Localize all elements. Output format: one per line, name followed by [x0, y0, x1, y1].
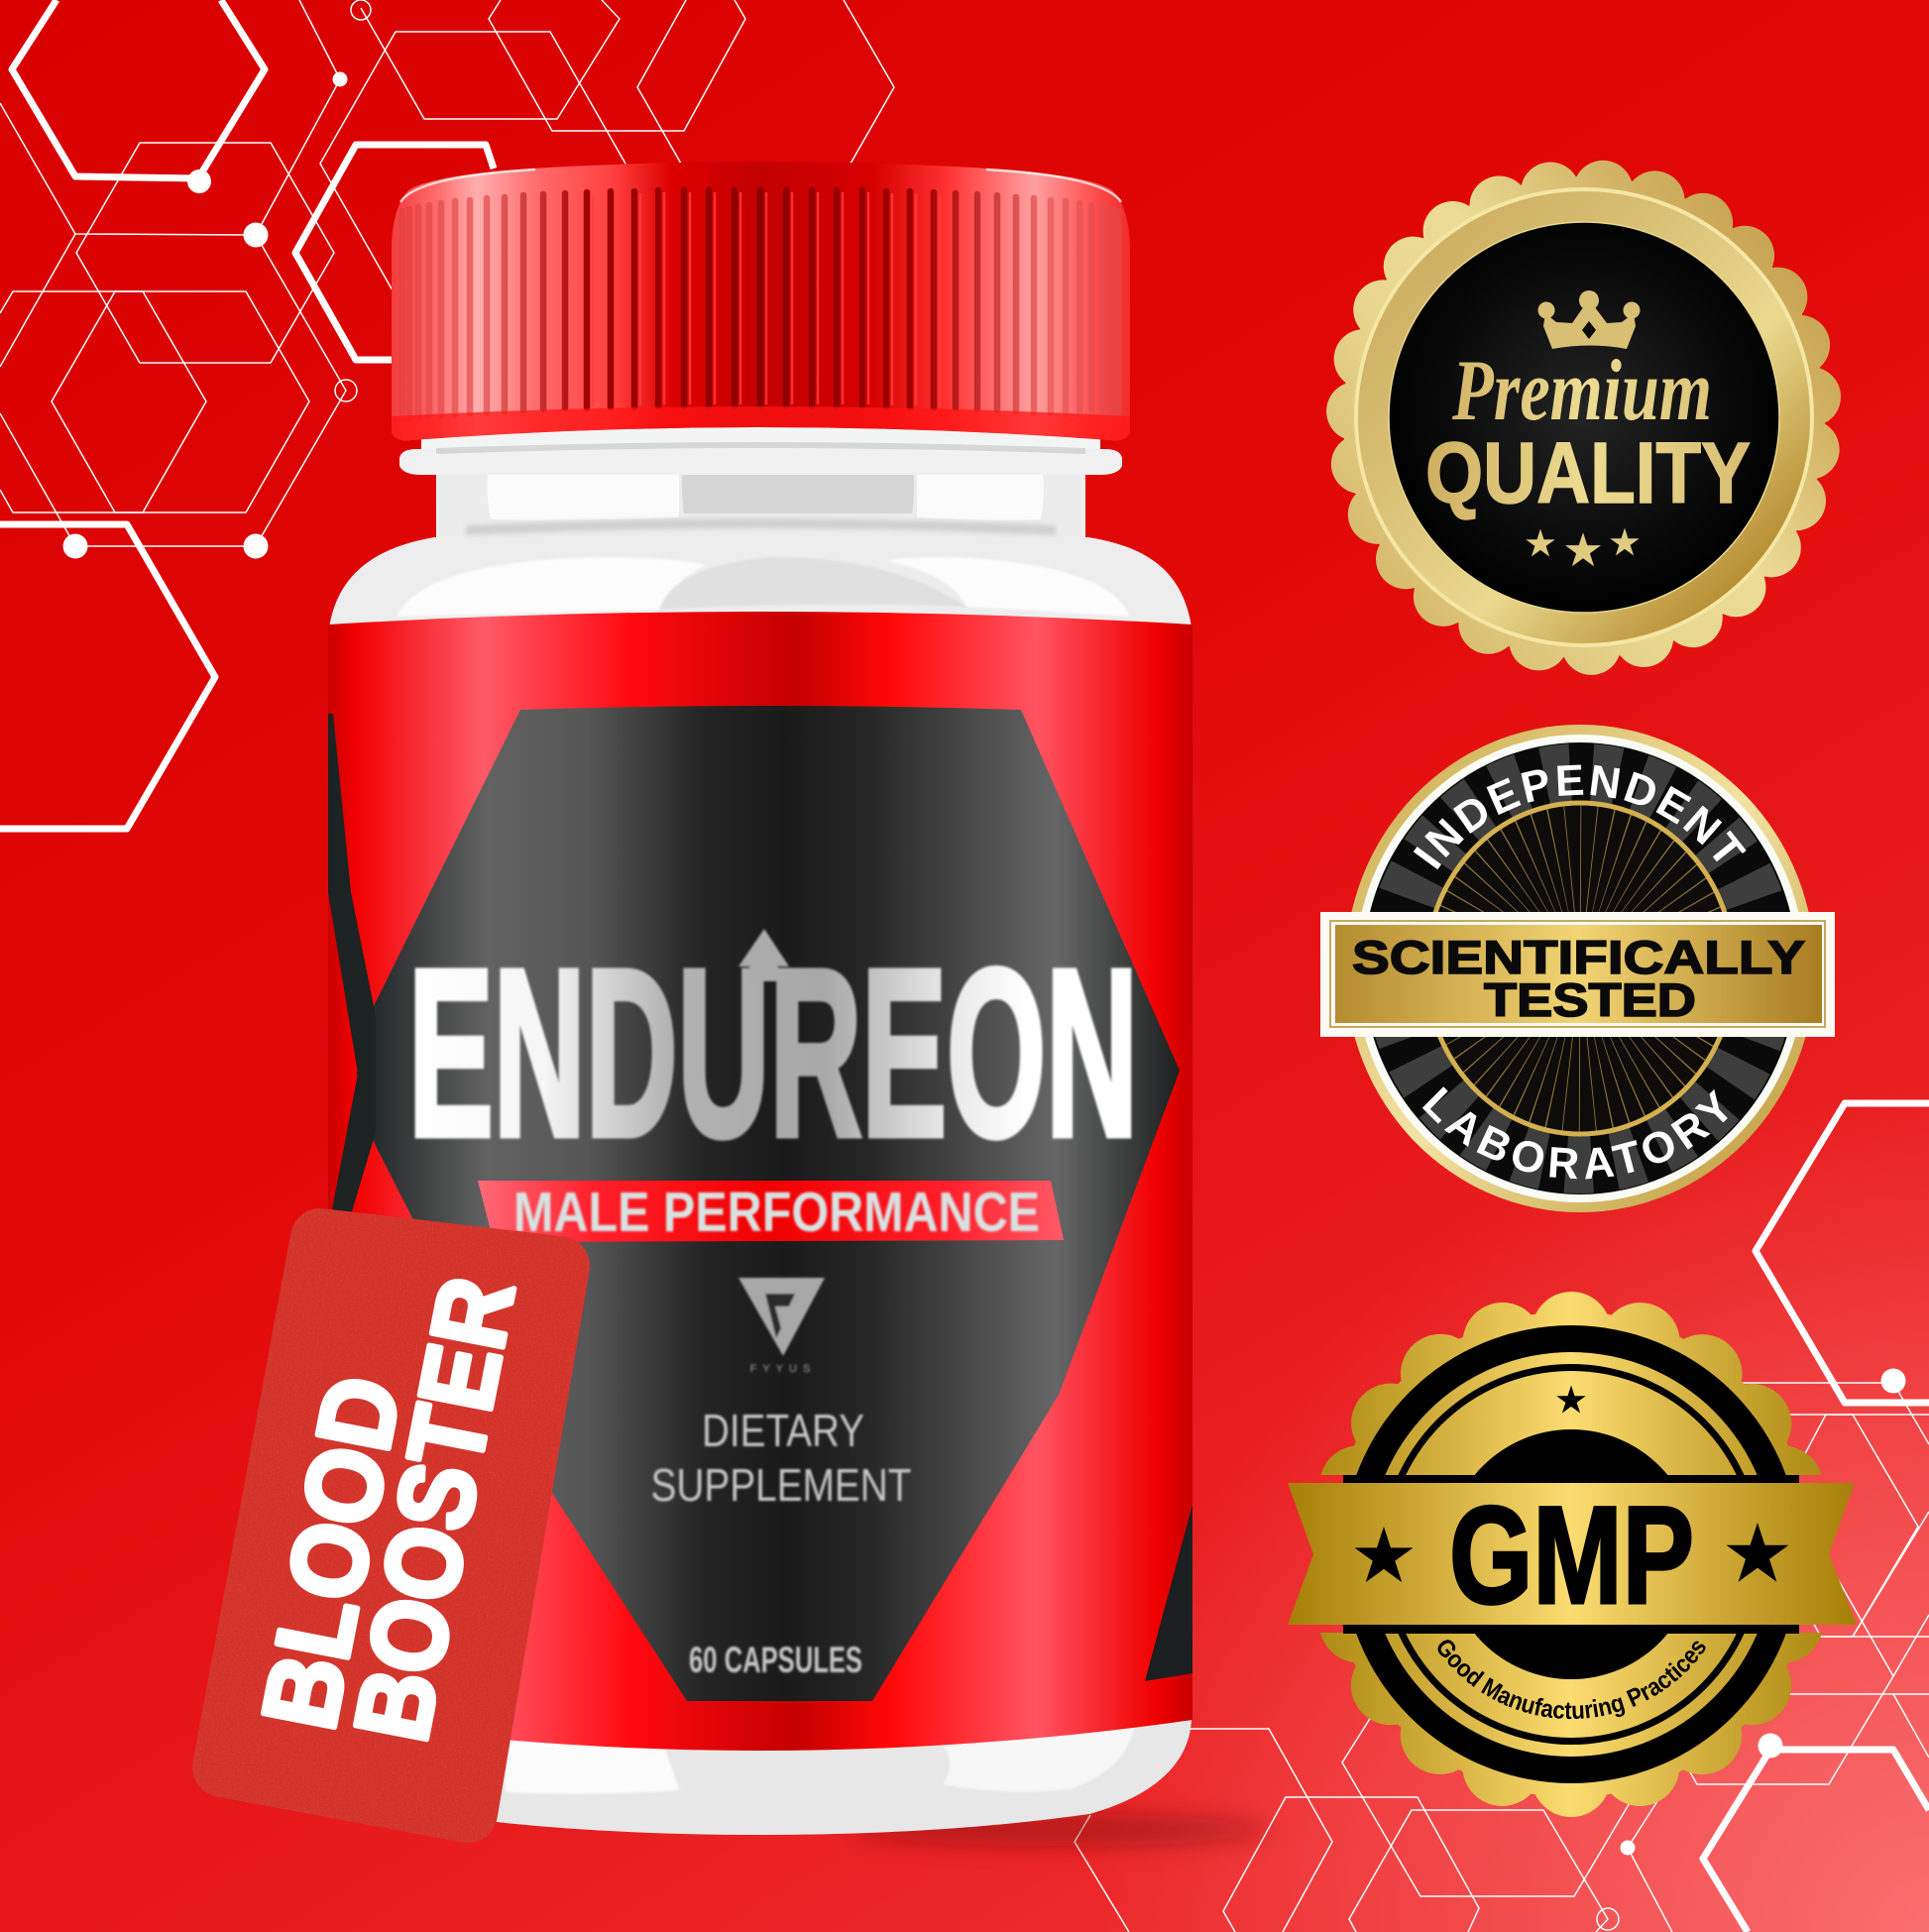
crown icon: [1538, 290, 1640, 349]
badge: scientifically tested: [1320, 725, 1835, 1212]
product bottle: [328, 162, 1192, 1835]
logo wordmark: ENDUREON: [408, 920, 1138, 1186]
black centre: [1389, 222, 1779, 613]
scalloped edge: [1338, 171, 1830, 663]
brand logo: FYYUS: [750, 1363, 816, 1375]
quality word: QUALITY: [1425, 425, 1751, 521]
laboratory arc: LABORATORY: [1421, 1086, 1728, 1180]
good manufacturing practices arc: Good Manufacturing Practices: [1437, 1640, 1705, 1719]
brand logo: [738, 1278, 825, 1375]
outer rings: [1345, 725, 1815, 1212]
hexagon network: bottom right: [1075, 1103, 1929, 1932]
badge: premium quality: [1338, 171, 1830, 663]
inner sunburst: [1426, 803, 1734, 1134]
card text: BLOOD: [241, 1367, 423, 1738]
dietary supplement text: [650, 1405, 912, 1511]
bottle base: [328, 1720, 1191, 1835]
concentric rings: [1342, 1325, 1800, 1783]
hexagon network: top left: [0, 0, 894, 829]
label left dark chevron: [328, 714, 376, 1215]
badge: gmp: [1288, 1292, 1857, 1817]
gold banner: [1320, 912, 1835, 1037]
scalloped edge: [1328, 1311, 1814, 1797]
dietary supplement text: DIETARY: [702, 1405, 864, 1456]
top star: [1556, 1386, 1586, 1414]
bottle label: [328, 612, 1192, 1751]
male performance banner: MALE PERFORMANCE: [513, 1181, 1040, 1244]
bottle shadow: [852, 1814, 1269, 1846]
capsule count: 60 CAPSULES: [689, 1640, 862, 1680]
striped ring: [1396, 774, 1764, 1163]
gold banner: TESTED: [1484, 973, 1696, 1026]
card text: [241, 1269, 537, 1750]
label dark hexagon: [357, 706, 1180, 1701]
independent arc: INDEPENDENT: [1414, 765, 1747, 870]
ribbon: GMP: [1449, 1477, 1694, 1633]
gold banner: SCIENTIFICALLY: [1352, 931, 1805, 983]
premium script: Premium: [1451, 343, 1712, 439]
gold ring: [1356, 189, 1812, 645]
ribbon: [1288, 1477, 1857, 1633]
label corner dark triangle: [1145, 1505, 1192, 1681]
card text: BOOSTER: [333, 1269, 537, 1750]
stars: [1526, 527, 1640, 566]
blood booster card: [222, 1238, 560, 1813]
bottle cap: [392, 162, 1130, 440]
logo wordmark: [408, 920, 1138, 1186]
dietary supplement text: SUPPLEMENT: [650, 1459, 912, 1511]
bottle shoulder and neck: [328, 419, 1192, 634]
